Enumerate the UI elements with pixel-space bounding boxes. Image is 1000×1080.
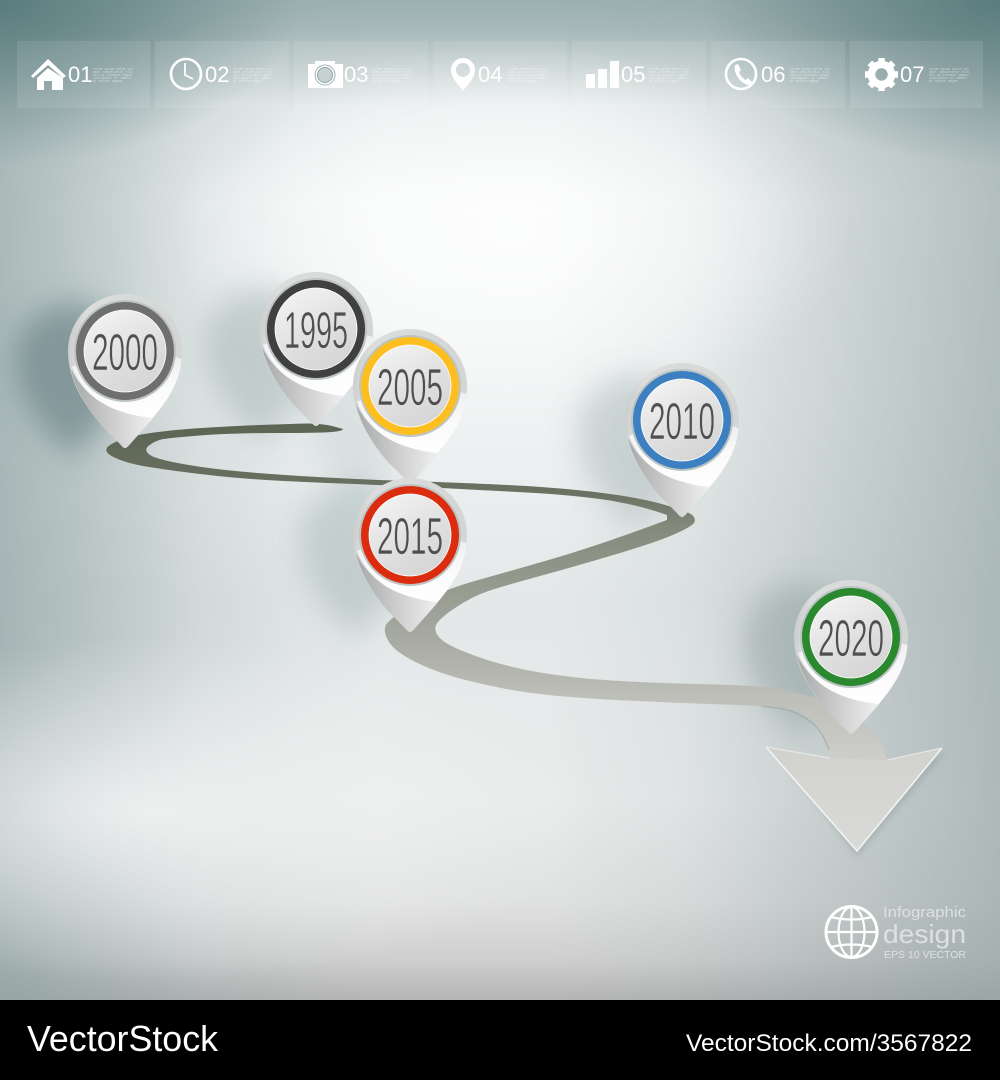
nav item 01 (17, 41, 150, 108)
road band (106, 423, 887, 760)
nav item 06: et dolore magna (790, 79, 819, 83)
nav item 02 (155, 41, 289, 108)
pin: 2005 (353, 329, 467, 483)
pin: 2010: 2010 (649, 393, 715, 451)
nav item 05: et dolore magna (649, 79, 678, 83)
nav item 06 (711, 41, 845, 108)
logo: infographic design (826, 904, 967, 961)
nav item 07: et dolore magna (929, 79, 958, 83)
footer bar: VectorStock (27, 1018, 219, 1059)
nav item 04: et dolore magna (508, 79, 537, 83)
footer bar (0, 1000, 1000, 1080)
icon: clock (171, 59, 201, 89)
nav item 05: Lorem ipsum dolor sit (649, 67, 689, 71)
nav item 02: 02 (205, 62, 229, 87)
icon: camera (308, 61, 343, 88)
nav item 01: sed do eiusmod tempor (93, 73, 133, 77)
nav item 01: amet consectetur elit (93, 70, 133, 74)
nav item 03: 03 (344, 62, 368, 87)
nav item 06: incididunt ut labore (790, 76, 828, 80)
nav item 05: amet consectetur elit (649, 70, 689, 74)
nav item 06: sed do eiusmod tempor (790, 73, 830, 77)
nav item 04: sed do eiusmod tempor (508, 73, 548, 77)
logo: infographic design: Infographic (883, 904, 967, 921)
icon: bars (586, 61, 619, 88)
pin: 2020 (794, 580, 908, 734)
nav item 04: amet consectetur elit (508, 70, 548, 74)
nav item 07: incididunt ut labore (929, 76, 967, 80)
nav item 04: Lorem ipsum dolor sit (508, 67, 548, 71)
pin: 2005: 2005 (377, 359, 443, 417)
pin: 2015 (353, 478, 467, 632)
nav item 05: 05 (621, 62, 645, 87)
road lower edge shade (761, 706, 829, 750)
nav item 07 (850, 41, 983, 108)
nav item 06: 06 (761, 62, 785, 87)
nav item 05: incididunt ut labore (649, 76, 687, 80)
pin: 2000: 2000 (92, 324, 158, 382)
icon: gear (865, 58, 898, 91)
icon: map pin (451, 58, 475, 91)
pin: 1995 (259, 272, 373, 426)
nav item 03: amet consectetur elit (372, 70, 412, 74)
nav item 02: sed do eiusmod tempor (233, 73, 273, 77)
nav item 06: Lorem ipsum dolor sit (790, 67, 830, 71)
nav item 02: Lorem ipsum dolor sit (233, 67, 273, 71)
logo: infographic design: design (883, 919, 966, 949)
nav item 01: incididunt ut labore (93, 76, 131, 80)
nav item 07: amet consectetur elit (929, 70, 969, 74)
logo: infographic design: EPS 10 VECTOR (884, 950, 966, 961)
nav item 07: 07 (900, 62, 924, 87)
nav item 05: sed do eiusmod tempor (649, 73, 689, 77)
pin shadows (15, 288, 857, 737)
nav item 06: amet consectetur elit (790, 70, 830, 74)
pin: 2020: 2020 (818, 610, 884, 668)
nav item 04 (433, 41, 567, 108)
nav item 07: Lorem ipsum dolor sit (929, 67, 969, 71)
nav item 07: sed do eiusmod tempor (929, 73, 969, 77)
footer bar: VectorStock.com/3567822 (686, 1030, 972, 1057)
icon: house (31, 59, 66, 90)
nav item 01: Lorem ipsum dolor sit (93, 67, 133, 71)
nav item 03: incididunt ut labore (372, 76, 410, 80)
pin: 2010 (625, 363, 739, 517)
navigation bar (17, 41, 983, 108)
icon: globe (826, 906, 877, 958)
winding road path (106, 423, 887, 760)
nav item 03 (294, 41, 428, 108)
nav item 01: et dolore magna (93, 79, 122, 83)
nav item 01: 01 (68, 62, 92, 87)
nav item 02: et dolore magna (233, 79, 262, 83)
nav item 04: incididunt ut labore (508, 76, 546, 80)
nav item 03: sed do eiusmod tempor (372, 73, 412, 77)
icon: phone (726, 59, 756, 89)
arrow shadow (790, 752, 946, 857)
nav item 02: amet consectetur elit (233, 70, 273, 74)
pin: 1995: 1995 (284, 302, 348, 360)
nav item 02: incididunt ut labore (233, 76, 271, 80)
pin: 2000 (68, 294, 182, 448)
nav item 04: 04 (478, 62, 502, 87)
nav item 03: Lorem ipsum dolor sit (372, 67, 412, 71)
nav item 05 (572, 41, 706, 108)
nav item 03: et dolore magna (372, 79, 401, 83)
arrow head (766, 747, 946, 857)
pin: 2015: 2015 (377, 508, 443, 566)
